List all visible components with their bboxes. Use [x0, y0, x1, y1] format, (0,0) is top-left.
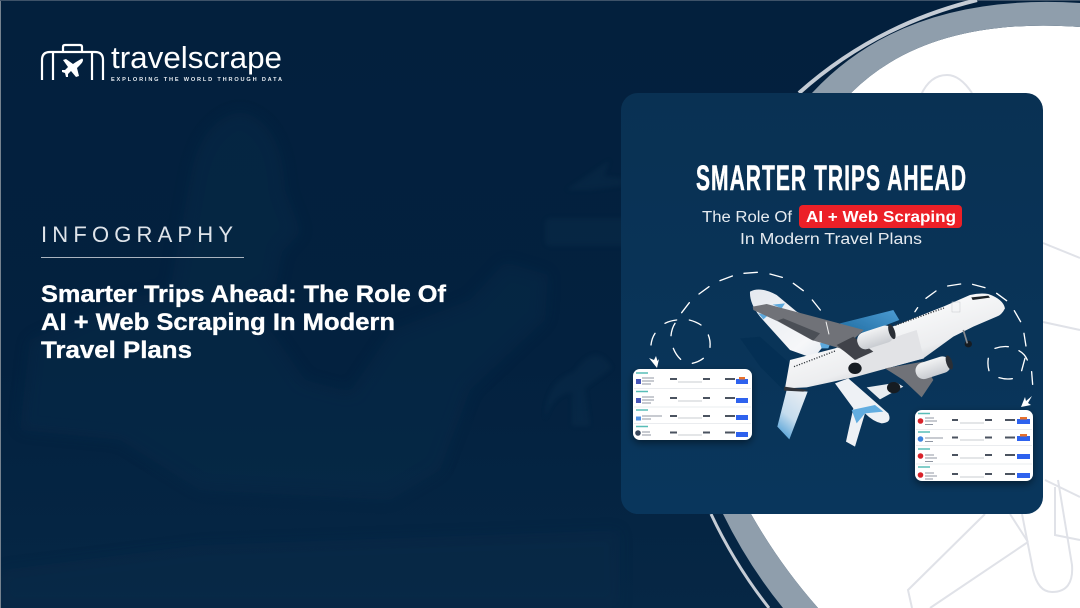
landing gear — [848, 341, 972, 393]
select buttons — [1017, 419, 1030, 478]
upper engine — [855, 323, 898, 351]
grey ring band: bottom — [723, 514, 818, 608]
tail root dark — [784, 387, 808, 392]
main heading: AI + Web Scraping In Modern — [41, 309, 395, 336]
panel: featured infographic card — [621, 93, 1043, 514]
row separators — [916, 430, 1032, 464]
wing root and gear bay — [837, 337, 873, 360]
white circle panel on the right — [700, 26, 1080, 608]
thin light ring: top — [799, 0, 977, 93]
lower engine — [913, 354, 955, 381]
lower wing and flaps — [885, 362, 933, 397]
text placeholders — [925, 418, 943, 479]
belly fairing — [857, 330, 924, 374]
faded shadow plane behind — [740, 337, 790, 390]
tail stub — [867, 383, 903, 399]
airline icons — [918, 418, 923, 424]
near wing grey — [753, 304, 864, 360]
label: infography: INFOGRAPHY — [41, 222, 233, 247]
window row front — [895, 308, 944, 325]
left tail stabilizer — [777, 390, 808, 439]
fuselage — [785, 294, 1005, 388]
main heading: Travel Plans — [41, 337, 192, 364]
logo tagline: EXPLORING THE WORLD THROUGH DATA — [111, 77, 282, 83]
door — [952, 302, 960, 312]
red highlight badge — [799, 205, 962, 228]
left image edge line — [0, 0, 1, 608]
top image edge line — [0, 0, 1080, 1]
select buttons — [736, 379, 748, 437]
dashed flight path: right — [915, 284, 1033, 384]
logo — [42, 40, 282, 83]
far wing cloud fill — [750, 289, 837, 358]
divider under label — [41, 257, 244, 258]
flight results card: right — [915, 410, 1033, 481]
blue sky patch behind wing — [840, 310, 899, 337]
red highlight badge: AI + Web Scraping — [806, 209, 956, 226]
row separators — [634, 388, 751, 424]
cabin labels — [918, 414, 930, 467]
logo icon: suitcase with plane — [42, 45, 103, 80]
flight results card: left — [633, 369, 752, 440]
main heading — [41, 281, 447, 364]
deal tags — [1020, 417, 1027, 436]
card subtitle line 1: The Role Of — [702, 209, 793, 226]
dashed flight path: left — [651, 272, 828, 363]
cloud patches on wing — [758, 303, 832, 348]
grey ring band: top — [812, 2, 1080, 93]
arrowhead: left flight path — [649, 356, 659, 368]
main heading: Smarter Trips Ahead: The Role Of — [41, 281, 447, 308]
watermark airplane outline — [908, 75, 1080, 608]
airline icons — [636, 379, 641, 403]
cabin labels — [636, 373, 648, 426]
cockpit windows — [971, 296, 990, 300]
card subtitle line 2: In Modern Travel Plans — [740, 231, 922, 248]
logo wordmark: travelscrape — [111, 40, 282, 75]
right tail stabilizer — [835, 378, 890, 447]
text placeholders — [642, 378, 662, 435]
window row rear — [794, 351, 836, 367]
background photo: decor on the right of the scene — [545, 160, 635, 426]
card title: SMARTER TRIPS AHEAD — [696, 160, 966, 198]
thin light ring: bottom — [711, 514, 769, 608]
airplane photo — [740, 289, 1005, 447]
deal tag — [739, 377, 745, 380]
arrowhead: right flight path — [1021, 396, 1032, 407]
background photo: person silhouette at desk — [0, 112, 620, 608]
